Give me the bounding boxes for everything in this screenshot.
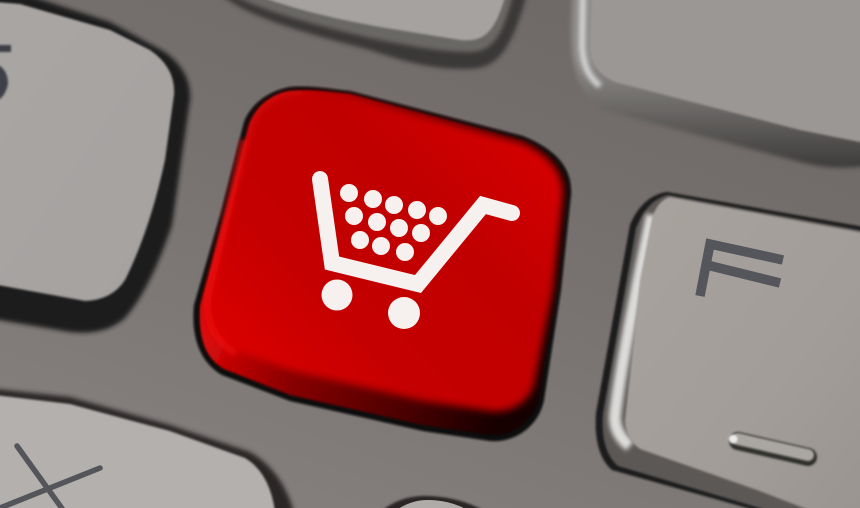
key: X xyxy=(0,386,296,508)
key: bottom centre xyxy=(372,496,498,508)
shadow around red key xyxy=(193,86,571,441)
cart frame xyxy=(320,179,512,284)
icon: shopping cart xyxy=(320,179,512,329)
key bevel xyxy=(603,195,860,508)
cart wheels xyxy=(322,280,420,329)
key legend fragment xyxy=(0,45,11,100)
letter F xyxy=(700,244,783,296)
left bevel highlight xyxy=(615,215,652,446)
bright rim, lower left xyxy=(208,140,244,354)
key: F xyxy=(596,192,860,508)
red key xyxy=(200,90,566,435)
key: top right xyxy=(571,0,860,168)
key: top centre xyxy=(216,0,528,69)
key home bump xyxy=(728,434,808,457)
key top face xyxy=(206,93,563,411)
cart items xyxy=(340,184,447,261)
key top face xyxy=(625,197,860,508)
key: top left xyxy=(0,0,190,333)
key side bevel xyxy=(200,90,566,435)
key shadow outline xyxy=(596,192,860,508)
letter X xyxy=(0,446,100,508)
